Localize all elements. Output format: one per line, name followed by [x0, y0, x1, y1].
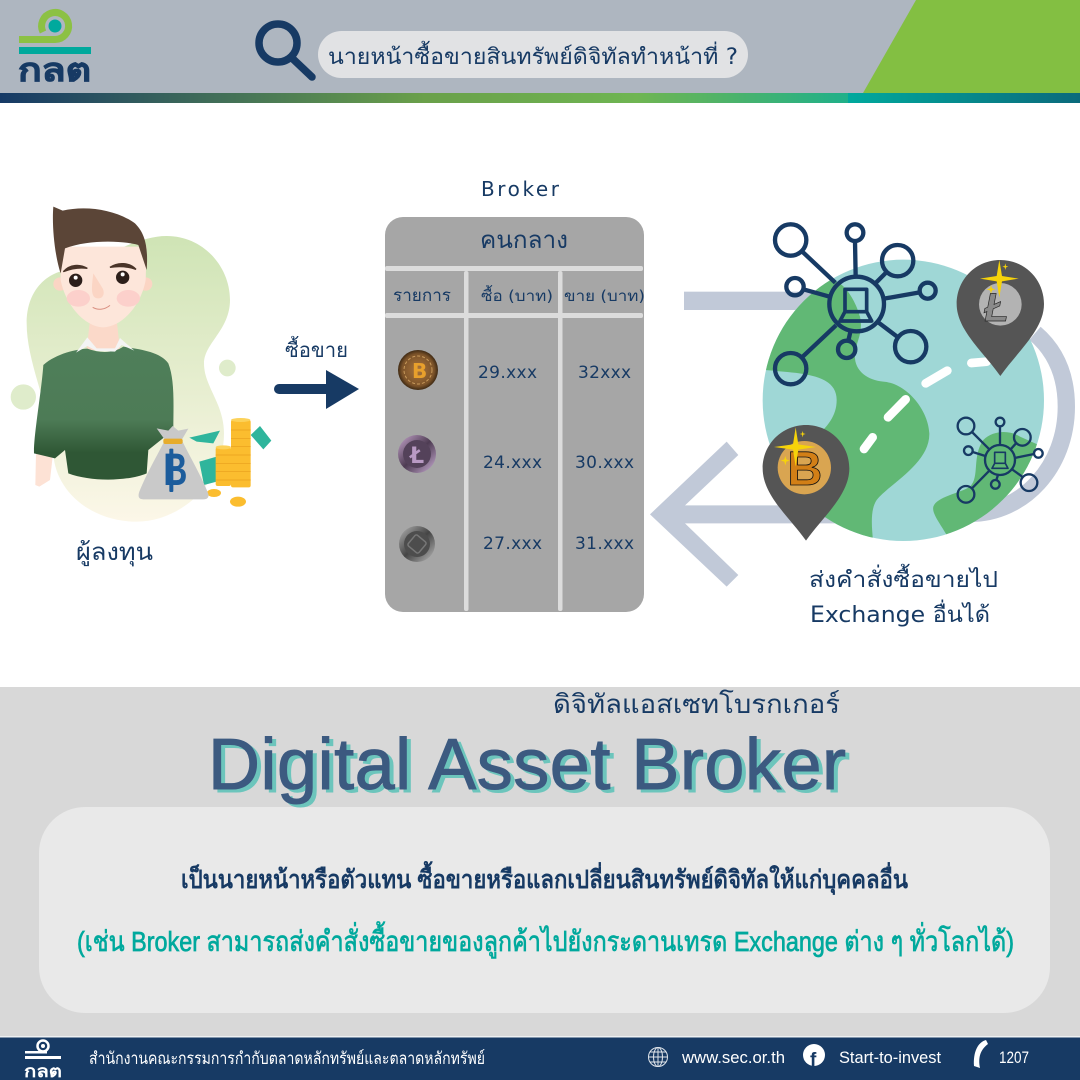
facebook page: Start-to-invest	[839, 1048, 941, 1067]
label: send orders to other exchanges: Exchange อื่นได้	[810, 599, 990, 628]
table title: คนกลาง	[480, 226, 568, 254]
header band	[0, 0, 1080, 103]
footer bar	[0, 1036, 1080, 1080]
footer logo	[24, 1040, 62, 1080]
table prices: 31.xxx	[575, 534, 634, 554]
logo: SEC Thailand	[18, 13, 91, 88]
phone number: 1207	[999, 1048, 1029, 1067]
icon: litecoin coin: Ł	[409, 444, 424, 469]
table prices: 24.xxx	[483, 453, 542, 473]
header question pill: นายหน้าซื้อขายสินทรัพย์ดิจิทัลทำหน้าที่ ?	[328, 41, 738, 70]
money: bills and coin stacks	[189, 418, 271, 507]
table column headers: ซื้อ (บาท)	[481, 285, 553, 305]
panel: broker price table	[385, 217, 645, 612]
table column headers	[393, 285, 645, 306]
header question pill	[318, 31, 748, 78]
icon: litecoin coin	[398, 435, 436, 473]
table column headers: รายการ	[393, 286, 451, 306]
icon: large network	[775, 224, 936, 384]
table prices: 27.xxx	[483, 534, 542, 554]
globe	[750, 260, 1050, 543]
background blob	[11, 236, 236, 522]
icon: litecoin map pin	[957, 260, 1044, 376]
bottom grey section	[0, 687, 1080, 1037]
definition text: เป็นนายหน้าหรือตัวแทน ซื้อขายหรือแลกเปลี่ยนสินทรัพย์ดิจิทัลให้แก่บุคคลอื่น	[181, 860, 908, 896]
icon: facebook: f	[810, 1050, 817, 1071]
globe network illustration	[650, 224, 1066, 587]
icon: bitcoin coin	[398, 350, 438, 390]
subtitle: Thai term: ดิจิทัลแอสเซทโบรกเกอร์	[553, 689, 840, 719]
icon: bitcoin map pin	[763, 425, 849, 541]
label: Broker: Broker	[481, 177, 560, 201]
footer organisation name: สำนักงานคณะกรรมการกำกับตลาดหลักทรัพย์และตลาดหลักทรัพย์	[89, 1049, 485, 1068]
table prices: 29.xxx	[478, 363, 537, 383]
label: send orders to other exchanges	[809, 564, 998, 628]
icon: magnifying glass	[259, 24, 312, 77]
arrows: order flow to exchanges and back	[650, 292, 1066, 587]
label: send orders to other exchanges: ส่งคำสั่งซื้อขายไป	[809, 564, 998, 593]
description box	[39, 807, 1050, 1013]
investor figure	[34, 207, 174, 487]
icon: bitcoin coin: B	[412, 359, 427, 383]
arrow: investor to broker	[279, 370, 359, 409]
label: buy and sell: ซื้อขาย	[285, 336, 348, 362]
label: investor: ผู้ลงทุน	[76, 538, 153, 567]
table column headers: ขาย (บาท)	[564, 287, 645, 305]
logo: SEC Thailand: กลต	[18, 52, 91, 88]
table prices: 32xxx	[578, 363, 631, 383]
table prices	[478, 363, 634, 554]
icon: telephone	[974, 1040, 988, 1068]
icon: bitcoin money bag: B	[163, 444, 187, 495]
icon: third coin	[399, 526, 435, 562]
icon: bitcoin map pin: B	[787, 442, 822, 496]
icon: bitcoin money bag	[139, 426, 208, 499]
website: www.sec.or.th	[681, 1048, 785, 1067]
icon: small network	[958, 418, 1043, 503]
table prices: 30.xxx	[575, 453, 634, 473]
icon: litecoin map pin: Ł	[983, 286, 1009, 330]
investor illustration	[11, 207, 271, 522]
title: Digital Asset Broker: Digital Asset Broker	[208, 725, 846, 805]
icon: globe	[648, 1048, 668, 1066]
icon: facebook	[803, 1044, 825, 1071]
